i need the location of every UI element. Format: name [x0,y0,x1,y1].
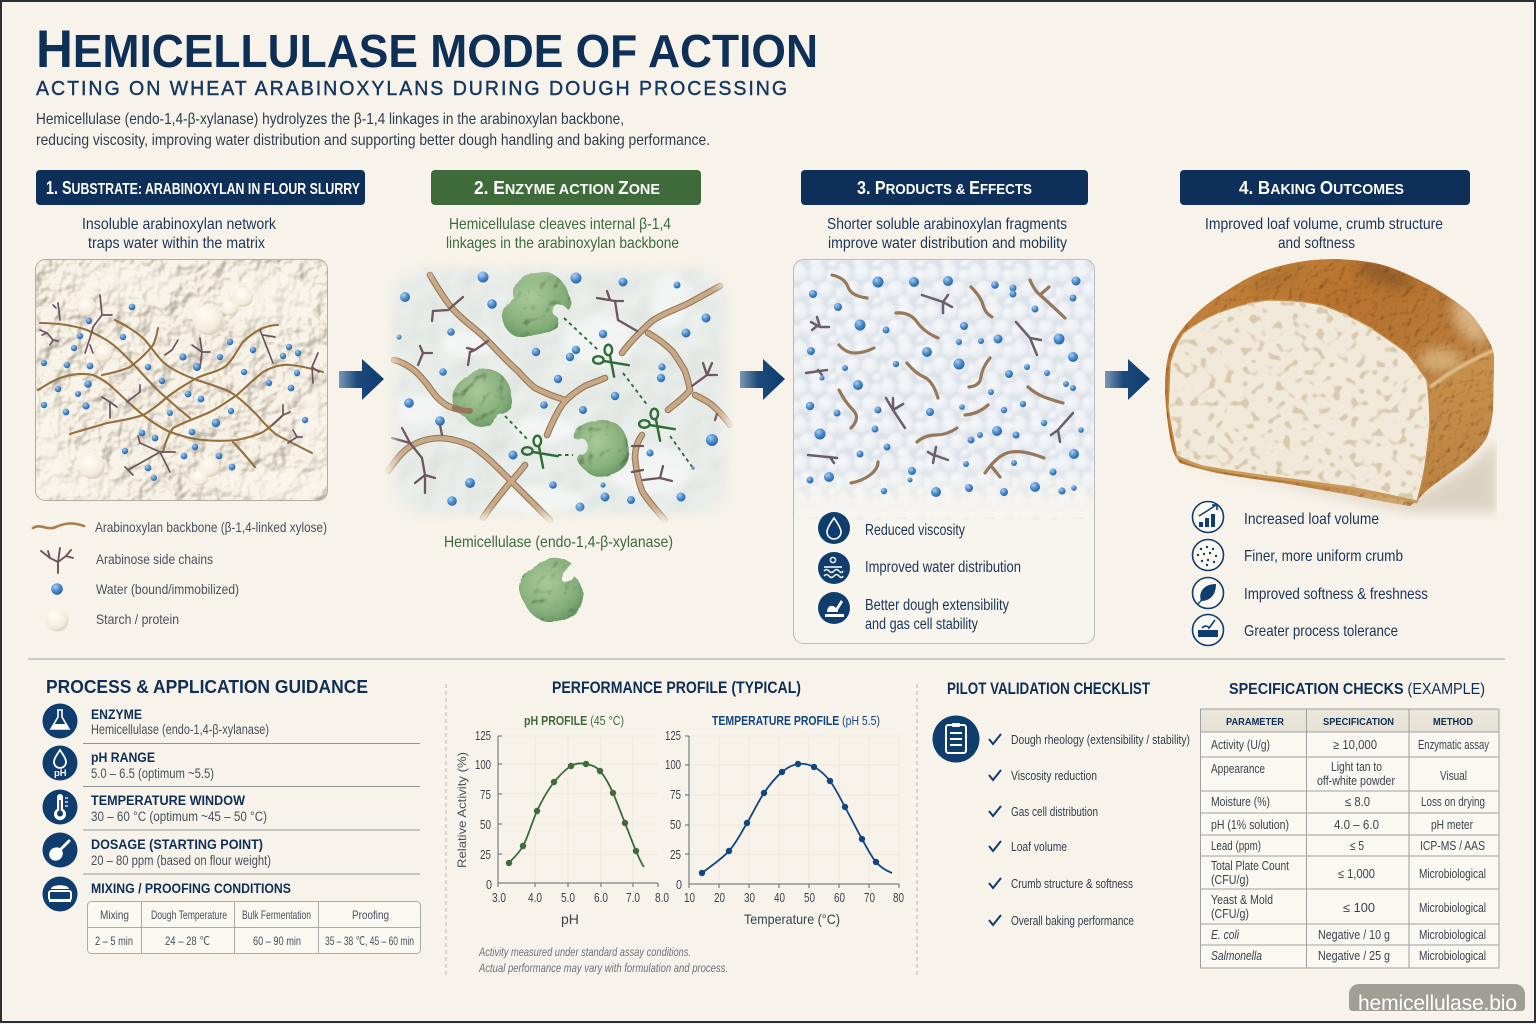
effect: improved water distribution [818,552,1021,584]
enzyme label: Hemicellulase (endo-1,4-β-xylanase) [444,534,673,551]
specification table: Loss on drying [1421,795,1485,809]
row: temperature window [91,793,267,824]
specification table: Negative / 10 g [1318,928,1390,942]
specification table: pH meter [1431,818,1473,832]
row: temperature window: 30 – 60 °C (optimum ~45 – 50 °C) [91,809,267,824]
backbone segments [388,275,730,520]
enzyme 1 [502,272,571,338]
chart: pH profile: 100 [475,757,491,772]
specification table: Salmonella [1211,949,1262,963]
arabinoxylan backbone network [38,320,323,467]
heading: PROCESS & APPLICATION GUIDANCE [46,677,368,697]
arrow 2 [740,359,785,400]
outcome: increased loaf volume [1192,502,1379,532]
panel: substrate legend [33,519,327,632]
specification table: ≤ 1,000 [1338,867,1375,881]
y axis title: Relative Activity (%) [455,752,469,868]
chart: pH profile: 50 [480,817,491,832]
water droplets [41,304,308,481]
specification table: ICP-MS / AAS [1420,839,1485,853]
checklist items: Viscosity reduction [1011,768,1097,783]
icon: scoop [42,832,78,868]
chart title: temperature: TEMPERATURE PROFILE (pH 5.5) [712,714,880,728]
specification table: Microbiological [1419,928,1486,942]
specification table: E. coli [1211,928,1240,942]
section header 3 [801,170,1088,205]
specification table: Appearance [1211,762,1265,776]
section header 1 [36,170,365,205]
chart: temperature profile: 40 [774,890,785,905]
specification table: 4.0 – 6.0 [1334,818,1379,832]
icon: clipboard [932,716,980,762]
arrow 3 [1105,359,1150,400]
panel: substrate flour slurry [22,259,328,501]
chart: temperature profile: 0 [676,877,682,892]
row: dosage [91,837,271,868]
chart: temperature profile: 50 [804,890,815,905]
water droplets [806,276,1084,497]
chart note: Activity measured under standard assay conditions. [478,945,691,959]
table: mixing and proofing: 35 – 38 ℃, 45 – 60 min [325,934,414,948]
legend: arabinoxylan backbone [33,519,327,535]
legend: starch / protein: Starch / protein [96,611,179,627]
outcome: softness and freshness [1192,578,1428,608]
specification table: Moisture (%) [1211,795,1270,809]
specification table: (CFU/g) [1211,873,1249,887]
table: mixing and proofing: 2 – 5 min [95,934,133,948]
effect: better extensibility: and gas cell stability [865,616,978,633]
section header 2 [431,170,701,205]
caption 2: linkages in the arabinoxylan backbone [446,235,679,252]
table: mixing and proofing: Proofing [352,908,389,922]
section header 3: 3. PRODUCTS & EFFECTS [857,178,1032,198]
water droplets [396,272,718,512]
watermark: hemicellulase.bio [1358,992,1517,1015]
specification table: SPECIFICATION [1323,716,1394,728]
specification table: ≤ 8.0 [1345,795,1370,809]
subtitle: ACTING ON WHEAT ARABINOXYLANS DURING DOUGH PROCESSING [36,78,789,100]
caption 3: Shorter soluble arabinoxylan fragments [827,216,1067,233]
chart: pH profile: 125 [475,728,491,743]
specification table: Negative / 25 g [1318,949,1390,963]
panel: pilot validation checklist [932,680,1190,928]
outcome: softness and freshness: Improved softness & freshness [1244,586,1428,603]
heading: SPECIFICATION CHECKS (EXAMPLE) [1229,681,1485,698]
row: enzyme: ENZYME [91,707,142,722]
effect: reduced viscosity [818,512,965,544]
arrow 1 [339,359,384,400]
chart: pH profile: 8.0 [655,890,669,905]
legend: starch / protein [46,608,179,632]
icon: pH drop: pH [54,768,67,779]
specification table: Yeast & Mold [1211,893,1273,907]
specification table: Enzymatic assay [1418,738,1490,752]
chart: pH profile: pH [561,911,579,927]
legend: arabinose side chains [41,548,213,573]
chart: temperature profile: 125 [665,728,681,743]
outcome: process tolerance [1192,614,1398,646]
mixing heading: MIXING / PROOFING CONDITIONS [91,881,291,896]
chart: temperature profile: 20 [714,890,725,905]
specification table: pH (1% solution) [1211,818,1289,832]
specification table: ≤ 100 [1343,901,1375,915]
table: mixing and proofing: 24 – 28 ℃ [165,934,210,948]
legend: arabinose side chains: Arabinose side chains [96,551,213,567]
caption 1: Insoluble arabinoxylan network [82,216,277,233]
scissors [522,345,675,468]
caption 1 [82,216,277,252]
caption 4: and softness [1278,235,1355,252]
table: mixing and proofing [88,902,420,954]
icon: thermometer [42,790,78,824]
outcome: increased loaf volume: Increased loaf volume [1244,511,1379,528]
icon: pH drop [42,746,78,780]
icon: flask [42,704,78,738]
chart: temperature profile: 70 [864,890,875,905]
table: mixing and proofing: Dough Temperature [151,908,227,922]
checklist items: Overall baking performance [1011,913,1134,928]
arabinose side chains [40,295,319,475]
section header 2: 2. ENZYME ACTION ZONE [474,178,660,198]
caption 1: traps water within the matrix [88,235,265,252]
panel: enzyme action zone [387,262,733,522]
chart: temperature profile [665,728,904,927]
chart: pH profile: 0 [486,877,492,892]
enzyme 3 [573,420,629,477]
specification table: off-white powder [1317,774,1395,788]
enzyme 2 [453,368,512,427]
panel: process and application guidance [42,677,420,954]
chart: pH profile: 4.0 [528,890,542,905]
row: enzyme [91,707,269,737]
section header 4: 4. BAKING OUTCOMES [1239,178,1404,198]
specification table: PARAMETER [1226,716,1284,728]
intro text: Hemicellulase (endo-1,4-β-xylanase) hydrolyzes the β-1,4 linkages in the arabinoxylan backbone, [36,111,624,128]
table: mixing and proofing: Mixing [100,908,129,922]
checklist items: Loaf volume [1011,839,1067,854]
starch granules [78,287,253,486]
row: dosage: 20 – 80 ppm (based on flour weight) [91,853,271,868]
table: mixing and proofing: 60 – 90 min [253,934,301,948]
chart: temperature profile: 80 [893,890,904,905]
legend: arabinoxylan backbone: Arabinoxylan backbone (β-1,4-linked xylose) [95,519,327,535]
effect: improved water distribution: Improved water distribution [865,559,1021,576]
specification table: ≥ 10,000 [1333,738,1377,752]
effect: better extensibility: Better dough extensibility [865,597,1009,614]
specification table: (CFU/g) [1211,907,1249,921]
specification table: Microbiological [1419,867,1486,881]
row: pH range: pH RANGE [91,750,155,765]
specification table: Total Plate Count [1211,859,1289,873]
caption 3 [827,216,1067,252]
heading: PILOT VALIDATION CHECKLIST [947,680,1150,698]
caption 2 [446,216,679,252]
chart note [478,945,728,975]
specification table: Microbiological [1419,901,1486,915]
icon: mixing bowl [42,876,78,912]
chart: temperature profile: 10 [684,890,695,905]
checklist items: Dough rheology (extensibility / stability) [1011,732,1190,747]
section header 4 [1180,170,1470,205]
specification table: Activity (U/g) [1211,738,1270,752]
caption 2: Hemicellulase cleaves internal β-1,4 [449,216,671,233]
panel: specification checks [1200,681,1499,968]
row: pH range [91,750,214,781]
chart title: pH: pH PROFILE (45 °C) [524,714,624,728]
chart: pH profile [475,728,669,927]
heading: PERFORMANCE PROFILE (TYPICAL) [552,679,801,697]
caption 3: improve water distribution and mobility [828,235,1067,252]
checklist items: Gas cell distribution [1011,804,1098,819]
section header 1: 1. SUBSTRATE: ARABINOXYLAN IN FLOUR SLURRY [46,178,361,198]
cleavage lines [505,318,693,468]
chart note: Actual performance may vary with formulation and process. [478,961,728,975]
specification table: Microbiological [1419,949,1486,963]
outcome: finer crumb: Finer, more uniform crumb [1244,548,1403,565]
chart: pH profile: 5.0 [561,890,575,905]
icon: enzyme [519,558,583,622]
specification table [1200,709,1499,968]
panel: performance profile [455,679,904,975]
specification table: Lead (ppm) [1211,839,1261,853]
soluble fragments [832,275,1065,483]
chart: temperature profile: Temperature (°C) [744,911,840,927]
chart: temperature profile: 60 [834,890,845,905]
bread loaf image [1160,255,1500,512]
chart: temperature profile: 25 [670,847,681,862]
specification table: ≤ 5 [1350,839,1364,853]
chart: pH profile: 25 [480,847,491,862]
legend: water: Water (bound/immobilized) [96,581,239,597]
side chains [392,291,717,493]
title: HEMICELLULASE MODE OF ACTION [36,20,818,79]
outcome: process tolerance: Greater process tolerance [1244,623,1398,640]
chart: temperature profile: 50 [670,817,681,832]
checklist items: Crumb structure & softness [1011,876,1133,891]
chart: temperature profile: 75 [670,787,681,802]
chart: temperature profile: 100 [665,757,681,772]
legend: water [51,581,239,597]
row: enzyme: Hemicellulase (endo-1,4-β-xylanase) [91,722,269,737]
chart: temperature profile: 30 [744,890,755,905]
row: dosage: DOSAGE (STARTING POINT) [91,837,263,852]
chart: pH profile: 3.0 [492,890,506,905]
specification table: Light tan to [1331,760,1382,774]
row: temperature window: TEMPERATURE WINDOW [91,793,245,808]
chart: pH profile: 75 [480,787,491,802]
chart: pH profile: 6.0 [594,890,608,905]
table: mixing and proofing: Bulk Fermentation [242,908,311,922]
watermark [1349,984,1525,1015]
specification table: Visual [1440,769,1467,783]
row: pH range: 5.0 – 6.5 (optimum ~5.5) [91,766,214,781]
panel: products and effects [793,259,1095,644]
intro text: reducing viscosity, improving water distribution and supporting better dough handling and baking performance. [36,132,710,149]
chart: pH profile: 7.0 [626,890,640,905]
effect: reduced viscosity: Reduced viscosity [865,522,965,539]
specification table: METHOD [1433,716,1473,728]
intro text [36,111,710,149]
caption 4: Improved loaf volume, crumb structure [1205,216,1443,233]
effect: better extensibility [818,592,1009,633]
caption 4 [1205,216,1443,252]
checklist items [989,732,1190,928]
outcome: finer crumb [1192,540,1403,570]
